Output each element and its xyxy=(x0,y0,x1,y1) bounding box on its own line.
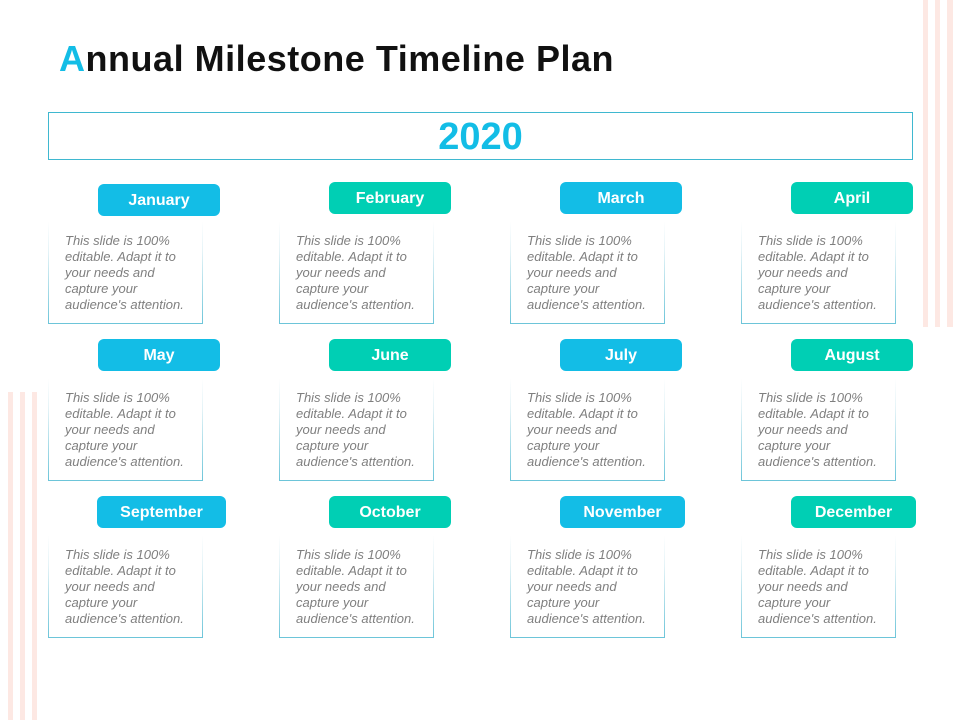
label: November xyxy=(560,496,685,528)
text card: October: your needs and xyxy=(296,579,386,594)
text card: April: This slide is 100% xyxy=(758,233,863,248)
month: July xyxy=(510,339,682,481)
label: January xyxy=(98,184,220,216)
label: December xyxy=(791,496,916,528)
text card: October xyxy=(279,536,434,638)
text card: June: your needs and xyxy=(296,422,386,437)
text card: February: your needs and xyxy=(296,265,386,280)
text card: July xyxy=(510,379,665,481)
label: April xyxy=(791,182,913,214)
label: July xyxy=(560,339,682,371)
decoration: right stripes xyxy=(923,0,953,327)
text card: May: editable. Adapt it to xyxy=(65,406,176,421)
month: October xyxy=(279,496,451,638)
label: June xyxy=(329,339,451,371)
text card: May: audience's attention. xyxy=(65,454,184,469)
text card: January: audience's attention. xyxy=(65,297,184,312)
text card: November: capture your xyxy=(527,595,599,610)
text card: March: capture your xyxy=(527,281,599,296)
month: August xyxy=(741,339,913,481)
label: July: July xyxy=(605,347,637,364)
label: September: September xyxy=(120,504,203,521)
month: June xyxy=(279,339,451,481)
label: January: January xyxy=(128,192,190,209)
text card: April: audience's attention. xyxy=(758,297,877,312)
text card: August xyxy=(741,379,896,481)
text card: September: This slide is 100% xyxy=(65,547,170,562)
label: May: May xyxy=(143,347,175,364)
year banner: 2020 xyxy=(438,116,523,158)
label: February: February xyxy=(356,190,424,207)
text card: August: editable. Adapt it to xyxy=(758,406,869,421)
month: November xyxy=(510,496,685,638)
title: Annual Milestone Timeline Plan xyxy=(59,38,614,79)
text card: March xyxy=(510,222,665,324)
label: April: April xyxy=(834,190,870,207)
text card: November: editable. Adapt it to xyxy=(527,563,638,578)
text card: April: your needs and xyxy=(758,265,848,280)
text card: June: audience's attention. xyxy=(296,454,415,469)
text card: August: audience's attention. xyxy=(758,454,877,469)
text card: February: editable. Adapt it to xyxy=(296,249,407,264)
text card: January: This slide is 100% xyxy=(65,233,170,248)
text card: August: your needs and xyxy=(758,422,848,437)
month: January xyxy=(48,184,220,324)
text card: September xyxy=(48,536,203,638)
text card: November: audience's attention. xyxy=(527,611,646,626)
label: February xyxy=(329,182,451,214)
text card: June: This slide is 100% xyxy=(296,390,401,405)
text card: January: your needs and xyxy=(65,265,155,280)
text card: November xyxy=(510,536,665,638)
month: May xyxy=(48,339,220,481)
text card: April xyxy=(741,222,896,324)
text card: December: audience's attention. xyxy=(758,611,877,626)
text card: April: capture your xyxy=(758,281,830,296)
text card: September: audience's attention. xyxy=(65,611,184,626)
label: October: October xyxy=(359,504,421,521)
text card: October: audience's attention. xyxy=(296,611,415,626)
month: April xyxy=(741,182,913,324)
text card: July: audience's attention. xyxy=(527,454,646,469)
text card: July: your needs and xyxy=(527,422,617,437)
text card: March: audience's attention. xyxy=(527,297,646,312)
month: February xyxy=(279,182,451,324)
text card: May: your needs and xyxy=(65,422,155,437)
text card: November: This slide is 100% xyxy=(527,547,632,562)
label: August: August xyxy=(824,347,880,364)
label: May xyxy=(98,339,220,371)
text card: August: capture your xyxy=(758,438,830,453)
text card: December: This slide is 100% xyxy=(758,547,863,562)
text card: July: capture your xyxy=(527,438,599,453)
label: December: December xyxy=(815,504,892,521)
month: December xyxy=(741,496,916,638)
text card: May xyxy=(48,379,203,481)
text card: February: capture your xyxy=(296,281,368,296)
text card: February: This slide is 100% xyxy=(296,233,401,248)
text card: March: editable. Adapt it to xyxy=(527,249,638,264)
text card: August: This slide is 100% xyxy=(758,390,863,405)
text card: October: editable. Adapt it to xyxy=(296,563,407,578)
text card: February: audience's attention. xyxy=(296,297,415,312)
text card: January: capture your xyxy=(65,281,137,296)
text card: December: capture your xyxy=(758,595,830,610)
text card: December: your needs and xyxy=(758,579,848,594)
text card: June: editable. Adapt it to xyxy=(296,406,407,421)
text card: June: capture your xyxy=(296,438,368,453)
text card: April: editable. Adapt it to xyxy=(758,249,869,264)
label: August xyxy=(791,339,913,371)
label: November: November xyxy=(583,504,662,521)
decoration: left stripes xyxy=(8,392,37,720)
text card: May: This slide is 100% xyxy=(65,390,170,405)
text card: February xyxy=(279,222,434,324)
text card: November: your needs and xyxy=(527,579,617,594)
text card: September: editable. Adapt it to xyxy=(65,563,176,578)
year banner xyxy=(48,112,913,160)
month: September xyxy=(48,496,226,638)
text card: January xyxy=(48,222,203,324)
label: September xyxy=(97,496,226,528)
text card: October: capture your xyxy=(296,595,368,610)
text card: June xyxy=(279,379,434,481)
label: June: June xyxy=(371,347,409,364)
text card: January: editable. Adapt it to xyxy=(65,249,176,264)
label: October xyxy=(329,496,451,528)
text card: September: capture your xyxy=(65,595,137,610)
text card: March: your needs and xyxy=(527,265,617,280)
label: March: March xyxy=(597,190,645,207)
text card: October: This slide is 100% xyxy=(296,547,401,562)
text card: March: This slide is 100% xyxy=(527,233,632,248)
text card: September: your needs and xyxy=(65,579,155,594)
month: March xyxy=(510,182,682,324)
text card: July: This slide is 100% xyxy=(527,390,632,405)
text card: December xyxy=(741,536,896,638)
label: March xyxy=(560,182,682,214)
text card: May: capture your xyxy=(65,438,137,453)
text card: July: editable. Adapt it to xyxy=(527,406,638,421)
text card: December: editable. Adapt it to xyxy=(758,563,869,578)
